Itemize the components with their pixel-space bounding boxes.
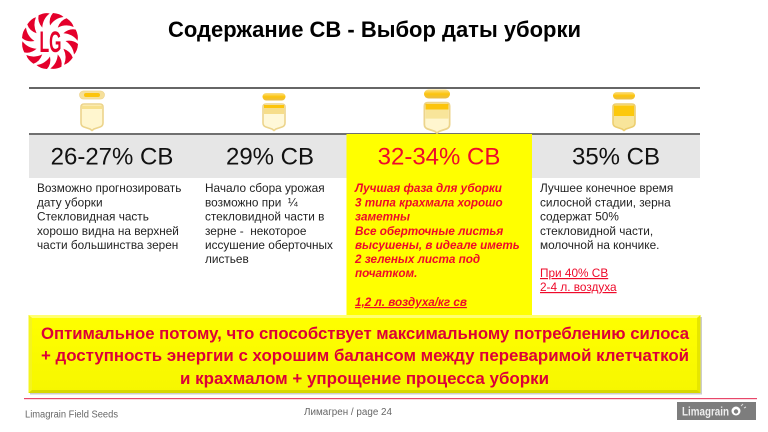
text block: column 1	[37, 181, 181, 252]
icon: Limagrain badge	[677, 402, 756, 420]
icon: LG logo: LG	[40, 26, 62, 59]
text block: column 1: дату уборки	[37, 196, 103, 210]
text block: column 4: стекловидной части,	[540, 224, 653, 238]
top rule	[29, 87, 700, 89]
icon: kernel 35%	[613, 92, 635, 130]
text block: column 4: силосной стадии, зерна	[540, 196, 671, 210]
text block: column 2: зерне - некоторое	[205, 224, 307, 238]
text block: column 4	[540, 181, 673, 294]
text block: column 1: части большинства зерен	[37, 238, 178, 252]
callout text line 1: Оптимальное потому, что способствует максимальному потреблению силоса	[41, 324, 690, 343]
heading: 32-34%: 32-34% СВ	[378, 144, 500, 170]
text block: column 4: Лучшее конечное время	[540, 181, 673, 195]
icon: kernel 32-34%	[424, 90, 450, 133]
panel: callout	[28, 315, 702, 394]
text block: column 2: стекловидной части в	[205, 210, 324, 224]
text block: column 3 highlighted: высушены, в идеале иметь	[355, 239, 520, 252]
heading: 29%: 29% СВ	[226, 144, 314, 170]
text block: column 4: При 40% СВ	[540, 266, 608, 280]
text block: column 1: Возможно прогнозировать	[37, 181, 181, 195]
text block: column 2: листьев	[205, 252, 249, 266]
text block: column 3 highlighted: 1,2 л. воздуха/кг св	[355, 296, 467, 309]
callout text line 2: + доступность энергии с хорошим балансом между переваримой клетчаткой	[41, 346, 689, 365]
icon: LG logo	[19, 10, 81, 72]
text block: column 4: 2-4 л. воздуха	[540, 280, 617, 294]
footer: left label: Limagrain Field Seeds	[25, 410, 118, 420]
callout text line 3: и крахмалом + упрощение процесса уборки	[180, 369, 549, 388]
icon: kernel 26-27%	[80, 91, 104, 130]
text block: column 3 highlighted: початком.	[355, 267, 417, 280]
text block: column 2: Начало сбора урожая	[205, 181, 325, 195]
text block: column 2: иссушение оберточных	[205, 238, 333, 252]
footer rule	[24, 398, 757, 399]
icon: Limagrain badge: Limagrain	[682, 406, 729, 418]
text block: column 3 highlighted: Все оберточные листья	[355, 225, 503, 238]
text block: column 1: Стекловидная часть	[37, 210, 149, 224]
icon: kernel 29%	[262, 93, 286, 130]
text block: column 3 highlighted	[354, 182, 520, 309]
text block: column 3 highlighted: 2 зеленых листа под	[354, 253, 480, 266]
text block: column 2: возможно при ¼	[205, 196, 298, 210]
text block: column 4: содержат 50%	[540, 210, 619, 224]
panel: highlighted column	[346, 134, 532, 315]
text block: column 4: молочной на кончике.	[540, 238, 659, 252]
heading: 35%: 35% СВ	[572, 144, 660, 170]
title: Содержание СВ - Выбор даты уборки	[168, 17, 581, 42]
text block: column 3 highlighted: Лучшая фаза для уборки	[354, 182, 502, 195]
text block: column 3 highlighted: 3 типа крахмала хорошо	[355, 196, 503, 210]
heading: 26-27%: 26-27% СВ	[51, 144, 173, 170]
text block: column 2	[205, 181, 333, 266]
text block: column 3 highlighted: заметны	[355, 210, 410, 224]
grey header band	[29, 134, 700, 178]
footer: page number: Лимагрен / page 24	[304, 407, 392, 418]
text block: column 1: хорошо видна на верхней	[37, 224, 179, 238]
